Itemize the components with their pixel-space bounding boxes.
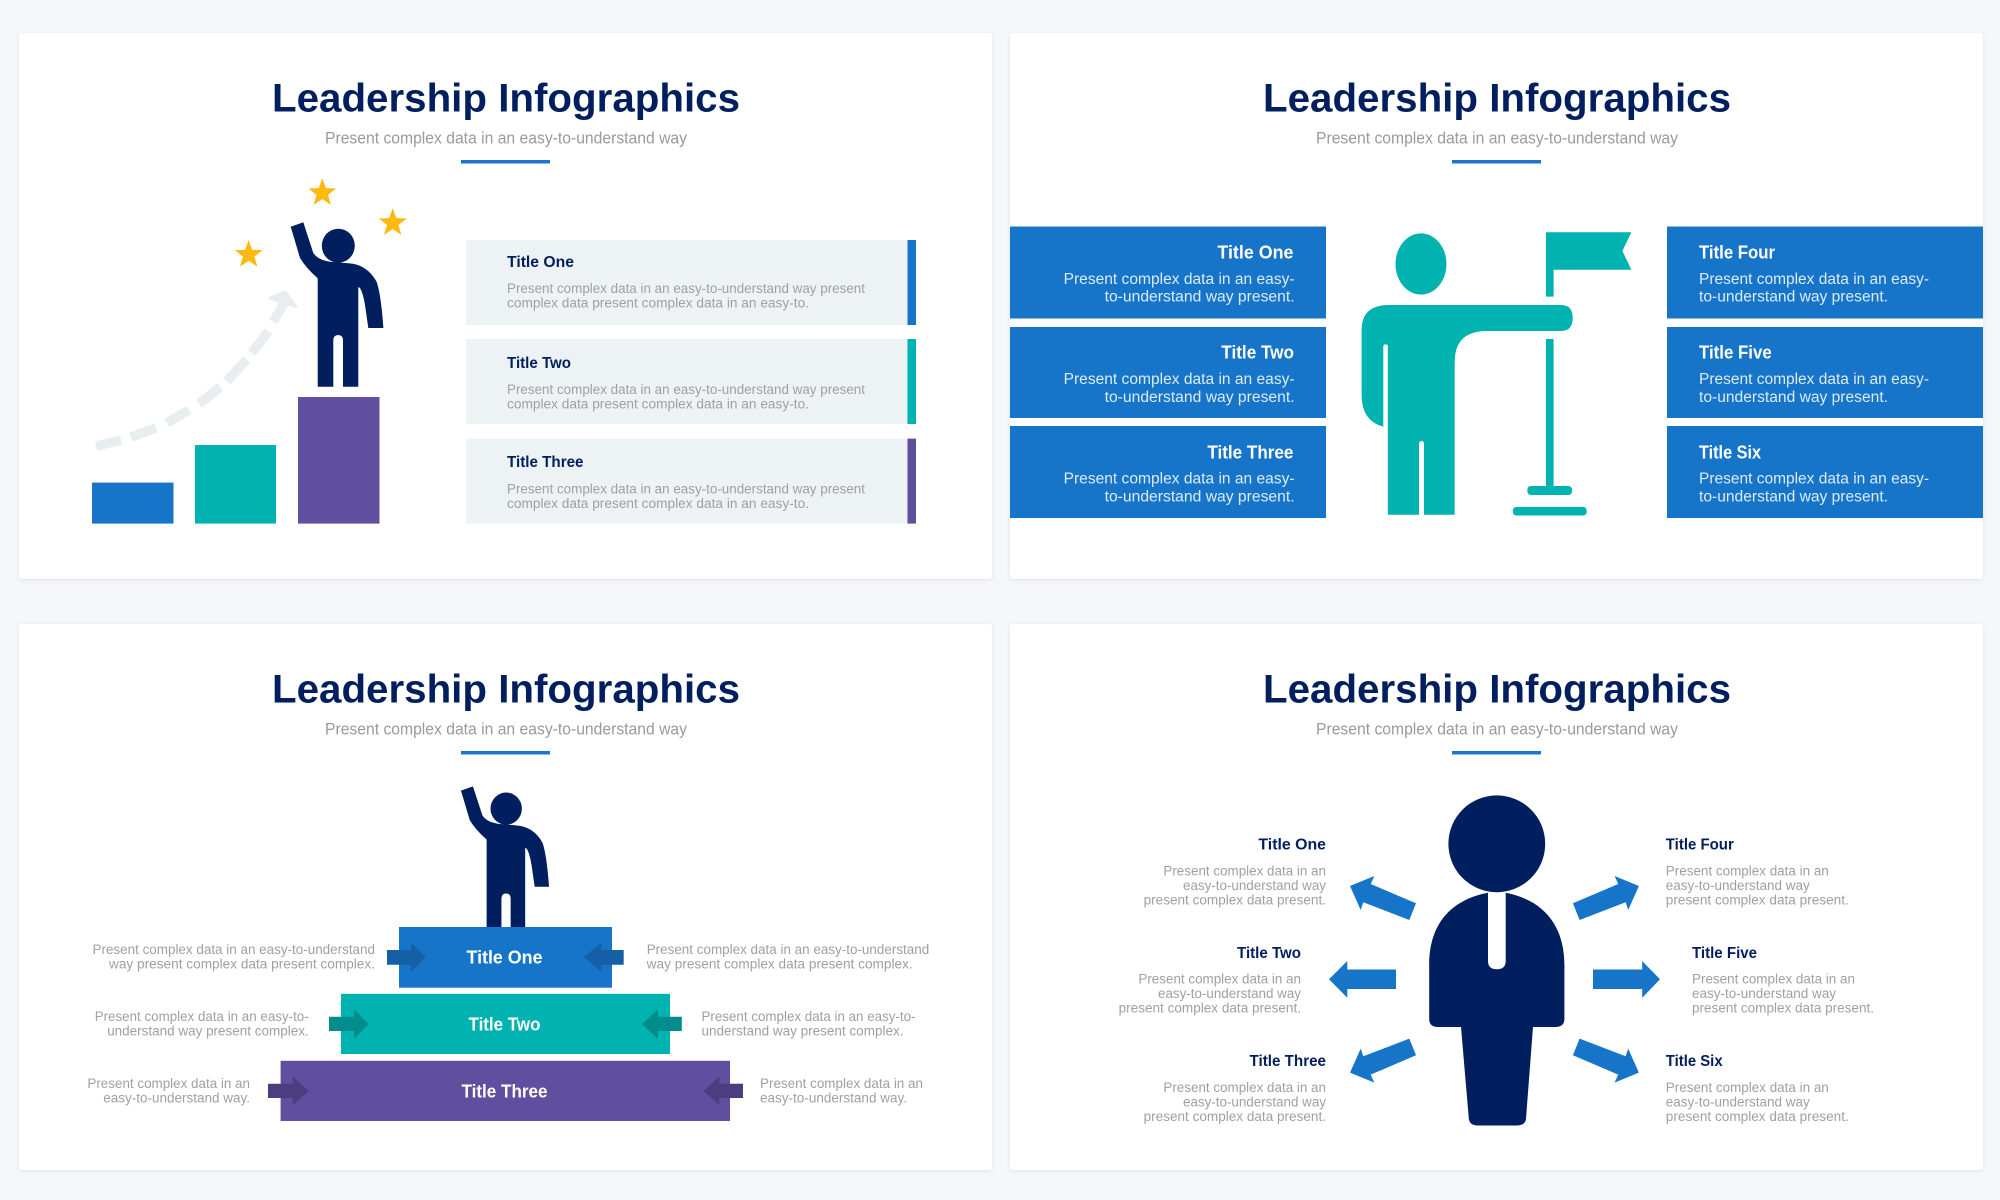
arrow: tier three right bbox=[703, 1076, 743, 1106]
arrow: upper left bbox=[1350, 876, 1416, 920]
text: title five: present complex data present. bbox=[1692, 1000, 1874, 1016]
pyramid tier: title two bbox=[341, 994, 670, 1054]
card: title three: Present complex data in an easy-to-understand way present bbox=[507, 482, 865, 497]
arrow: tier one right bbox=[584, 942, 624, 972]
text: tier two right: understand way present complex. bbox=[702, 1024, 904, 1038]
icon: star right bbox=[379, 208, 407, 235]
bar: blue bbox=[92, 483, 174, 524]
text: title six: Title Six bbox=[1666, 1053, 1723, 1070]
text: tier three right: easy-to-understand way. bbox=[760, 1090, 907, 1106]
panel: pyramid leadership bbox=[19, 624, 992, 1170]
box: title five bbox=[1667, 327, 1983, 418]
card: title three: Title Three bbox=[507, 454, 584, 471]
card: title one: Title One bbox=[507, 254, 574, 271]
box: title five: to-understand way present. bbox=[1699, 389, 1888, 406]
text: tier one right: Present complex data in an easy-to-understand bbox=[647, 942, 929, 957]
heading: Leadership Infographics bbox=[272, 668, 740, 712]
box: title five: Present complex data in an easy- bbox=[1699, 371, 1929, 388]
text: title one: present complex data present. bbox=[1144, 893, 1326, 908]
text: title six: present complex data present. bbox=[1666, 1109, 1849, 1124]
text: title two bbox=[1119, 945, 1301, 1016]
box: title six: Title Six bbox=[1699, 442, 1761, 462]
heading underline bbox=[461, 160, 550, 164]
text: title four: Present complex data in an bbox=[1666, 864, 1829, 878]
box: title four: Title Four bbox=[1699, 242, 1775, 262]
bar: teal bbox=[195, 445, 276, 524]
box: title three bbox=[1010, 426, 1326, 518]
icon: flag on pole bbox=[1513, 232, 1631, 516]
text: title one: easy-to-understand way bbox=[1183, 878, 1326, 893]
box: title six bbox=[1667, 426, 1983, 518]
text: tier two right: Present complex data in an easy-to- bbox=[702, 1009, 916, 1024]
person with tie bbox=[1429, 795, 1564, 1126]
pyramid tier: title three: Title Three bbox=[462, 1082, 548, 1102]
text: title five: Present complex data in an bbox=[1692, 972, 1855, 986]
text: title six: Present complex data in an bbox=[1666, 1080, 1829, 1095]
arrow: tier two left bbox=[329, 1010, 369, 1039]
text: title four: easy-to-understand way bbox=[1666, 878, 1810, 893]
person reaching for stars bbox=[291, 222, 383, 387]
arrow: tier one left bbox=[387, 942, 426, 972]
subtitle: Present complex data in an easy-to-understand way bbox=[1316, 128, 1678, 148]
card: title three bbox=[466, 439, 916, 524]
arrow: lower right bbox=[1573, 1039, 1639, 1083]
box: title three: Present complex data in an easy- bbox=[1064, 471, 1295, 488]
card: title three: complex data present complex data in an easy-to. bbox=[507, 496, 809, 511]
arrow: lower left bbox=[1350, 1039, 1416, 1083]
text: tier two left: understand way present complex. bbox=[107, 1024, 309, 1038]
arrow: middle left bbox=[1329, 961, 1396, 998]
box: title two: to-understand way present. bbox=[1105, 389, 1295, 406]
box: title one bbox=[1010, 226, 1326, 318]
pyramid tier: title one bbox=[399, 927, 612, 988]
subtitle: Present complex data in an easy-to-understand way bbox=[325, 128, 687, 148]
text: tier one right: way present complex data present complex. bbox=[646, 956, 913, 972]
pyramid tier: title three bbox=[281, 1061, 730, 1121]
text: tier three right bbox=[760, 1076, 923, 1106]
text: tier one left: way present complex data present complex. bbox=[108, 956, 375, 972]
box: title one: Present complex data in an easy- bbox=[1064, 271, 1295, 288]
text: title two: easy-to-understand way bbox=[1158, 986, 1301, 1001]
card: title two: Present complex data in an easy-to-understand way present bbox=[507, 382, 865, 397]
box: title one: Title One bbox=[1217, 242, 1293, 262]
panel: staircase leadership bbox=[19, 33, 992, 579]
arrow: tier three left bbox=[268, 1076, 309, 1106]
card: title one: complex data present complex data in an easy-to. bbox=[507, 295, 809, 310]
box: title two bbox=[1010, 327, 1326, 418]
box: title four: Present complex data in an easy- bbox=[1699, 271, 1929, 288]
card: title one: Present complex data in an easy-to-understand way present bbox=[507, 281, 865, 296]
box: title one: to-understand way present. bbox=[1105, 289, 1295, 306]
text: title four: Title Four bbox=[1666, 836, 1734, 854]
person pointing to flag bbox=[1362, 233, 1573, 515]
text: title three: present complex data present. bbox=[1144, 1109, 1326, 1124]
text: tier two left: Present complex data in an easy-to- bbox=[95, 1009, 309, 1024]
text: title two: Title Two bbox=[1237, 945, 1301, 962]
subtitle: Present complex data in an easy-to-understand way bbox=[325, 720, 687, 738]
text: title three: easy-to-understand way bbox=[1183, 1095, 1326, 1110]
text: tier one left: Present complex data in an easy-to-understand bbox=[92, 942, 375, 957]
subtitle: Present complex data in an easy-to-understand way bbox=[1316, 720, 1678, 738]
card: title two bbox=[466, 339, 916, 424]
box: title six: to-understand way present. bbox=[1699, 488, 1888, 505]
text: tier one left bbox=[92, 942, 375, 972]
text: tier one right bbox=[646, 942, 929, 972]
icon: star top bbox=[308, 178, 336, 205]
box: title five: Title Five bbox=[1699, 343, 1772, 363]
text: title five bbox=[1692, 945, 1874, 1016]
dashed growth arrow bbox=[96, 292, 296, 446]
box: title four bbox=[1667, 226, 1983, 318]
pyramid tier: title two: Title Two bbox=[468, 1014, 540, 1034]
pyramid tier: title one: Title One bbox=[466, 948, 542, 968]
heading underline bbox=[1452, 751, 1541, 754]
heading underline bbox=[461, 751, 550, 754]
text: tier three left: Present complex data in an bbox=[87, 1076, 250, 1091]
card: title two: complex data present complex data in an easy-to. bbox=[507, 397, 809, 412]
text: tier two right bbox=[702, 1009, 916, 1038]
text: title one: Title One bbox=[1258, 836, 1326, 854]
text: title three: Title Three bbox=[1250, 1053, 1326, 1070]
card: title two: Title Two bbox=[507, 355, 571, 372]
arrow: middle right bbox=[1593, 961, 1660, 998]
text: title three: Present complex data in an bbox=[1163, 1080, 1326, 1095]
box: title two: Present complex data in an easy- bbox=[1064, 371, 1295, 388]
text: title four bbox=[1666, 836, 1849, 908]
arrow: tier two right bbox=[642, 1010, 682, 1039]
text: tier three right: Present complex data in an bbox=[760, 1076, 923, 1091]
panel: central leader bbox=[1010, 624, 1983, 1170]
text: tier three left: easy-to-understand way. bbox=[103, 1090, 250, 1106]
text: title five: easy-to-understand way bbox=[1692, 986, 1836, 1001]
arrow: upper right bbox=[1573, 876, 1639, 920]
heading: Leadership Infographics bbox=[272, 77, 740, 121]
text: title five: Title Five bbox=[1692, 945, 1757, 962]
bar: purple bbox=[298, 397, 380, 524]
heading: Leadership Infographics bbox=[1263, 77, 1731, 121]
heading: Leadership Infographics bbox=[1263, 668, 1731, 712]
text: title two: present complex data present. bbox=[1119, 1000, 1301, 1016]
text: tier two left bbox=[95, 1009, 309, 1038]
text: title six bbox=[1666, 1053, 1849, 1124]
text: title four: present complex data present. bbox=[1666, 893, 1849, 908]
text: title one bbox=[1144, 836, 1326, 908]
box: title three: to-understand way present. bbox=[1105, 488, 1295, 505]
heading underline bbox=[1452, 160, 1541, 164]
box: title three: Title Three bbox=[1207, 442, 1293, 462]
text: title three bbox=[1144, 1053, 1326, 1124]
box: title six: Present complex data in an easy- bbox=[1699, 471, 1929, 488]
card: title one bbox=[466, 240, 916, 325]
text: tier three left bbox=[87, 1076, 250, 1106]
box: title four: to-understand way present. bbox=[1699, 289, 1888, 306]
icon: star left bbox=[235, 240, 263, 267]
text: title two: Present complex data in an bbox=[1138, 972, 1301, 986]
box: title two: Title Two bbox=[1221, 343, 1294, 363]
text: title one: Present complex data in an bbox=[1163, 864, 1326, 878]
text: title six: easy-to-understand way bbox=[1666, 1095, 1810, 1110]
person on top of pyramid bbox=[461, 786, 549, 932]
panel: flag leader bbox=[1010, 33, 1983, 579]
